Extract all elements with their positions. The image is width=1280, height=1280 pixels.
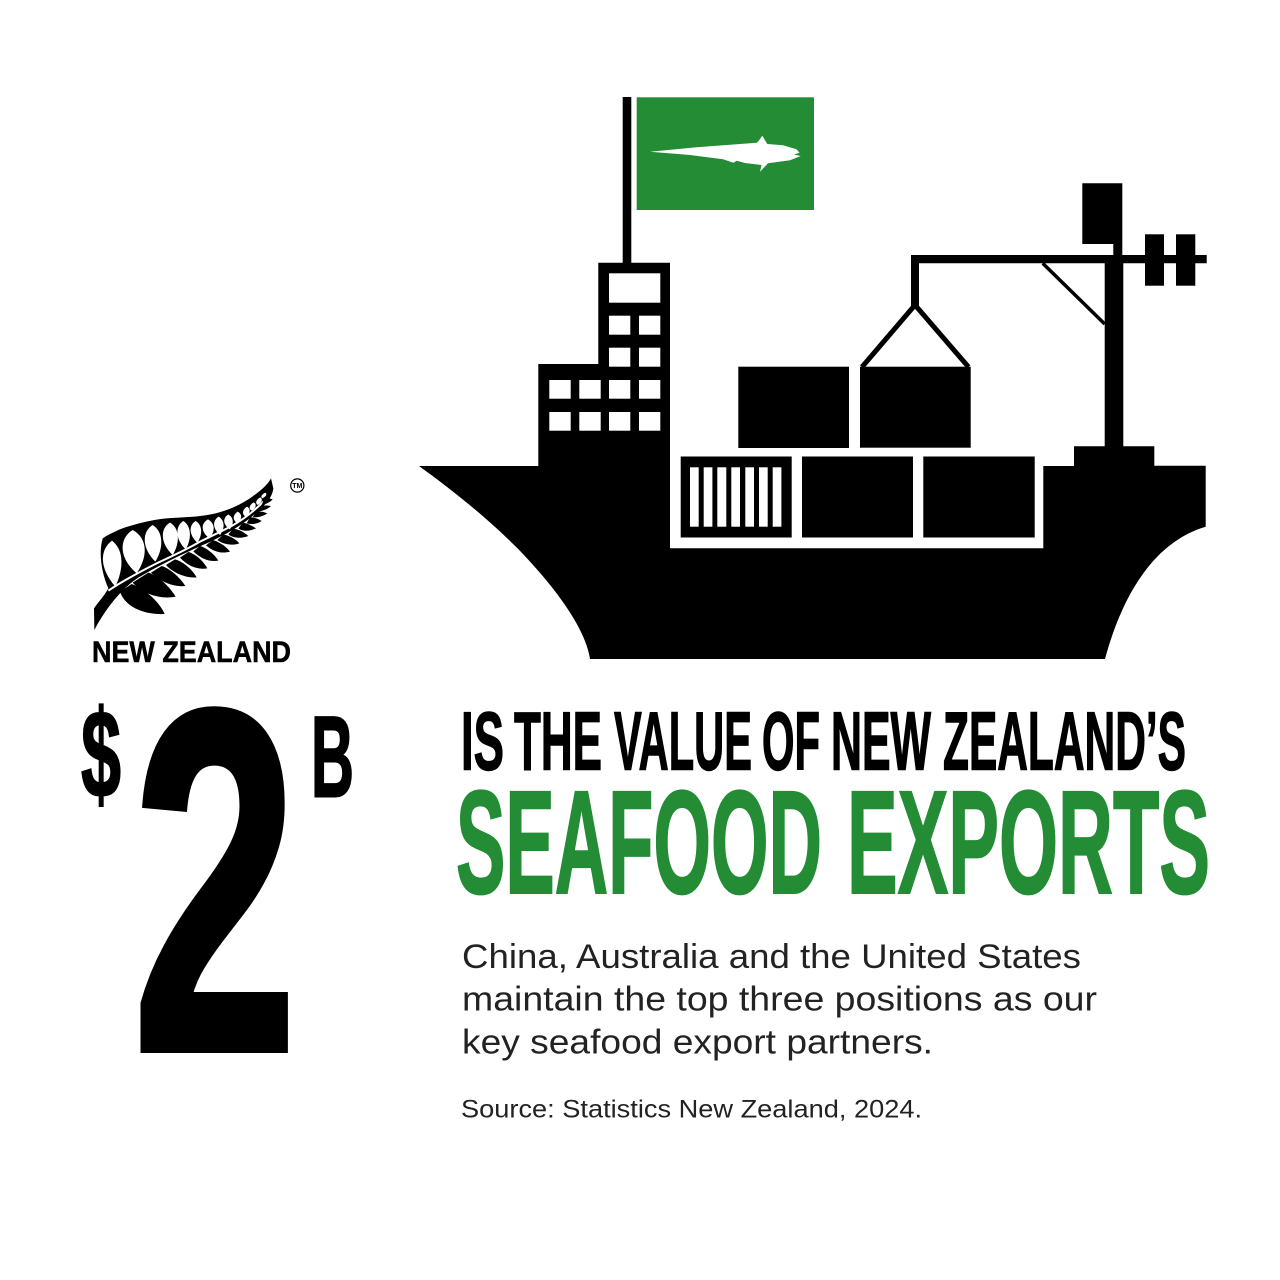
body text xyxy=(462,938,1097,1061)
trademark: TM xyxy=(292,483,303,490)
trademark xyxy=(291,479,304,492)
crane brace xyxy=(1043,263,1105,324)
source note: Source: Statistics New Zealand, 2024. xyxy=(461,1095,922,1123)
body text: maintain the top three positions as our xyxy=(462,981,1097,1019)
container slats xyxy=(690,467,781,527)
body text: key seafood export partners. xyxy=(462,1023,933,1061)
headline line one: NEW xyxy=(831,694,931,788)
headline line one: THE xyxy=(514,694,602,788)
headline line one: VALUE xyxy=(614,694,752,788)
icon: silver fern xyxy=(94,478,273,630)
flag pole xyxy=(623,97,631,267)
icon: cargo ship xyxy=(419,97,1207,659)
big value: $2B xyxy=(81,609,354,1154)
numeral 2: 2 xyxy=(132,609,298,1154)
containers xyxy=(681,367,1035,538)
headline line one: IS xyxy=(461,694,504,788)
hull and superstructure xyxy=(419,183,1207,659)
headline xyxy=(456,694,1210,925)
crane counterweights xyxy=(1145,234,1195,286)
headline line one xyxy=(461,694,1186,788)
headline line two: SEAFOOD xyxy=(456,761,822,925)
headline line one: OF xyxy=(762,694,820,788)
dollar sign: $ xyxy=(81,686,121,824)
bridge windows xyxy=(549,273,660,431)
letter B: B xyxy=(311,694,354,822)
logo: New Zealand fern mark xyxy=(92,478,304,669)
flag with fish xyxy=(637,97,814,210)
crane sling xyxy=(862,305,968,367)
wordmark: NEW ZEALAND xyxy=(92,636,291,669)
body text: China, Australia and the United States xyxy=(462,938,1081,976)
